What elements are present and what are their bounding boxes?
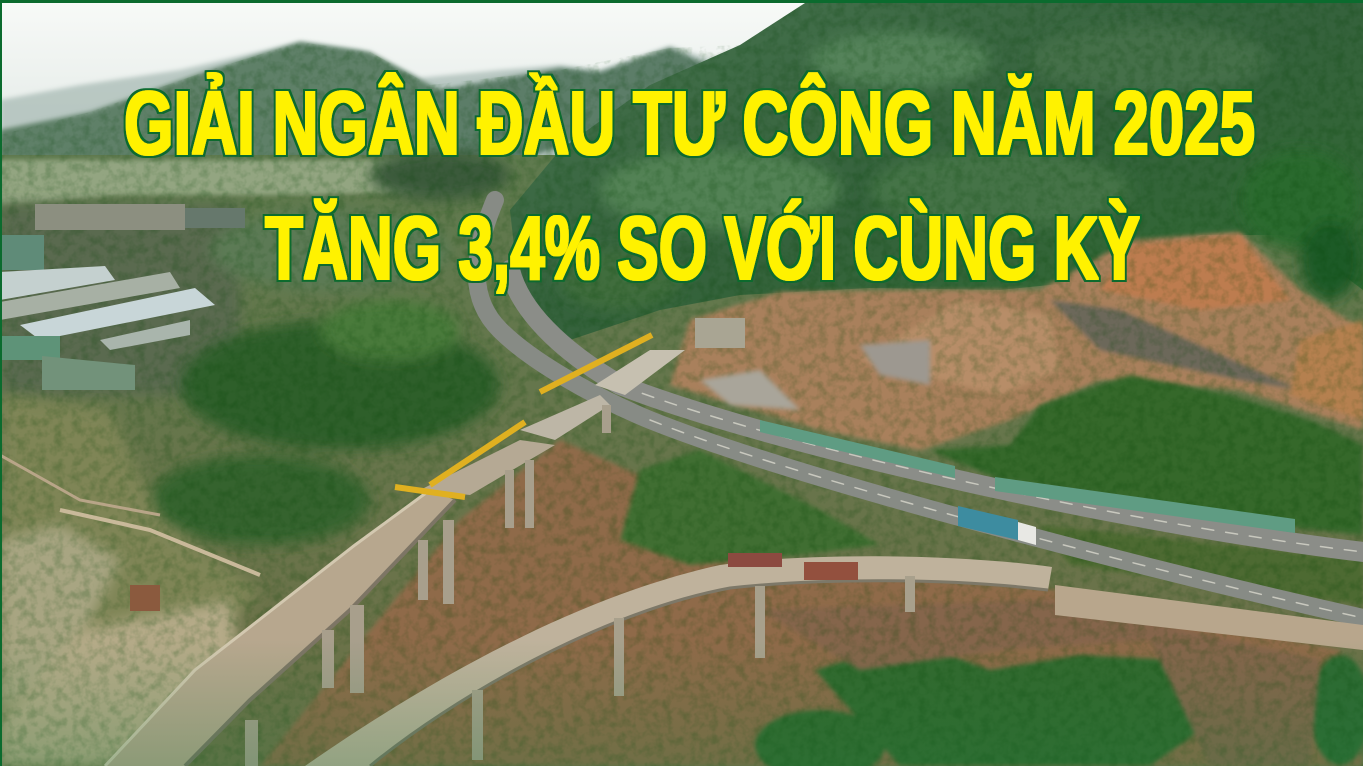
forest hillside (510, 3, 1363, 340)
factory buildings (0, 204, 245, 390)
highway (477, 200, 1363, 618)
fade toward bottom (0, 640, 1363, 766)
yellow launching gantries (395, 335, 652, 497)
bottom right trees (755, 640, 1363, 766)
lower-left fields (0, 395, 260, 766)
excavated ground under arch (760, 600, 1320, 766)
far mountains (0, 42, 720, 170)
dirt paths and hut (0, 455, 260, 611)
truck on highway (958, 506, 1036, 545)
valley and ground base (0, 155, 1363, 766)
left factory area (0, 205, 240, 395)
quarry earthworks (670, 232, 1363, 450)
sky (0, 0, 1363, 170)
top green border (0, 0, 1363, 3)
rock and concrete patches in quarry (695, 318, 930, 410)
forest texture (560, 25, 1360, 310)
viaduct piers (245, 405, 611, 766)
green hill in the middle right (930, 375, 1363, 535)
main viaduct (105, 335, 685, 766)
curved viaduct (305, 553, 1363, 766)
title (124, 72, 1255, 299)
red earth construction zone below viaduct (260, 440, 1363, 766)
mid-left trees (150, 150, 510, 545)
pale valley field (0, 160, 480, 205)
green strip between highways (620, 450, 880, 565)
green noise barriers (760, 420, 1295, 533)
